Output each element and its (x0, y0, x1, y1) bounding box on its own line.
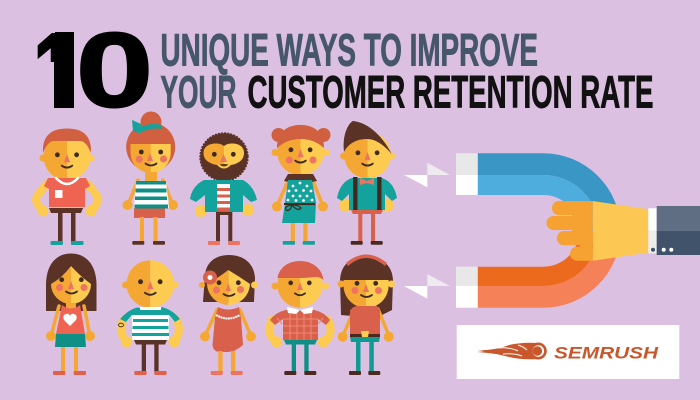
hand holding magnet (547, 201, 648, 261)
number 10: 1 (33, 12, 77, 130)
character: bald boy in striped shirt (118, 260, 180, 375)
icon: top lightning bolt (404, 163, 450, 187)
horseshoe magnet (456, 153, 621, 308)
icon: arm tattoo (118, 323, 124, 327)
number 10 (38, 32, 149, 108)
character: girl with long hair and heart top (46, 254, 96, 375)
title (38, 32, 653, 108)
character: girl with flower in hair (199, 255, 258, 375)
icon: flower (203, 270, 217, 284)
shirt cuff and suit sleeve (648, 206, 700, 255)
icon: bottom lightning bolt (404, 274, 450, 299)
character: bearded man (190, 134, 257, 245)
icon: fireball (477, 342, 547, 360)
number 10: 0 (76, 12, 153, 130)
character: girl with bun and striped top (122, 112, 178, 245)
logo wordmark: SEMRUSH (554, 344, 659, 362)
character: boy in salmon shirt (36, 128, 98, 245)
title line 2: YOUR (160, 66, 236, 118)
character: boy in plaid shirt (269, 261, 331, 375)
panel: SEMrush logo (457, 325, 679, 379)
character: man with quiff and suspenders (337, 121, 397, 245)
character: girl with pigtails (272, 125, 330, 245)
character: girl with headband (338, 254, 395, 375)
